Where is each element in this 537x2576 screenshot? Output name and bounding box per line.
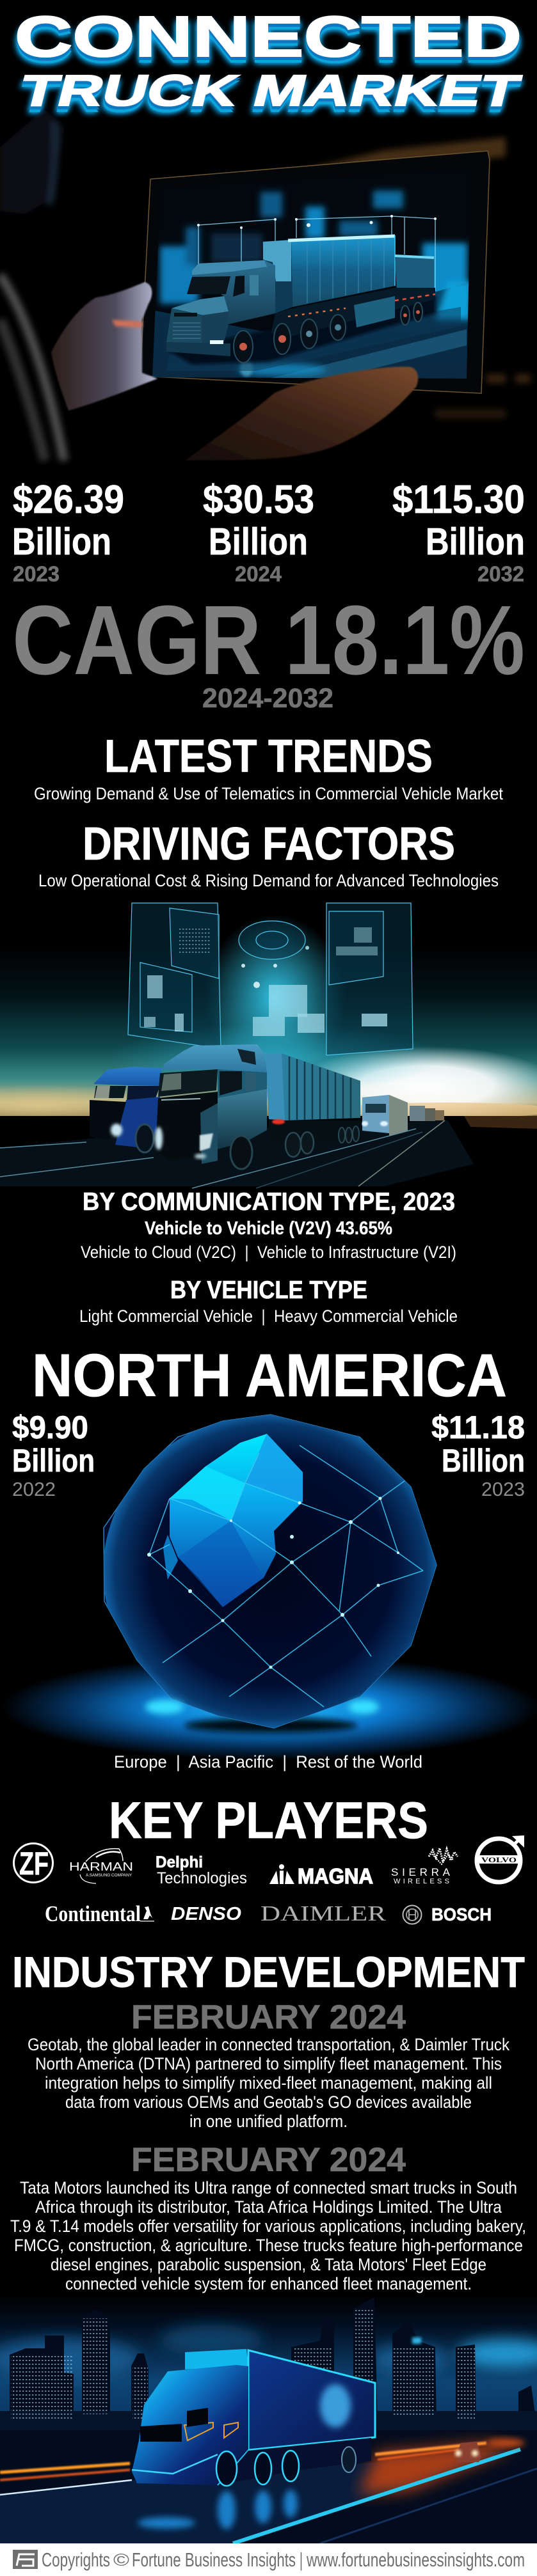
floor shadow bbox=[184, 1718, 357, 1733]
logo: Magna bbox=[269, 1864, 373, 1888]
blurred skyline on screen bbox=[160, 191, 467, 307]
development 2 bbox=[10, 2141, 526, 2293]
logo: Volvo bbox=[477, 1835, 524, 1882]
clouds bbox=[0, 2325, 537, 2382]
stat: 2032: 2032 bbox=[477, 562, 524, 586]
road bbox=[0, 2430, 537, 2511]
logo: Delphi Technologies: Delphi bbox=[156, 1853, 203, 1871]
hologram cargo glyphs bbox=[144, 927, 387, 1036]
region: North America heading: NORTH AMERICA bbox=[32, 1342, 507, 1410]
stat: North America 2023: Billion bbox=[442, 1443, 525, 1479]
sphere rim and network bbox=[103, 1413, 438, 1729]
road lines bbox=[0, 2480, 132, 2495]
stat: 2032: $115.30 bbox=[392, 478, 525, 522]
right glow spot bbox=[348, 1700, 379, 1714]
city image: neon truck on highway bbox=[0, 2295, 537, 2543]
other regions: Europe | Asia Pacific | Rest of the World bbox=[114, 1752, 422, 1771]
development 2: diesel engines, parabolic suspension, & Tata Motors' Fleet Edge bbox=[51, 2255, 486, 2274]
globe bbox=[2, 1413, 537, 1760]
development 2: connected vehicle system for enhanced fleet management. bbox=[65, 2274, 472, 2293]
copyright text: | bbox=[300, 2549, 303, 2571]
logo: Denso: DENSO bbox=[171, 1904, 241, 1924]
tablet bbox=[140, 151, 490, 393]
logo: Harman: HARMAN bbox=[69, 1860, 133, 1873]
stat: 2024 bbox=[203, 478, 314, 586]
development 1: in one unified platform. bbox=[189, 2112, 348, 2131]
by communication type: Vehicle to Vehicle (V2V) 43.65% bbox=[145, 1218, 392, 1239]
stat: 2024: 2024 bbox=[235, 562, 282, 586]
copyright text bbox=[42, 2549, 525, 2571]
title line 1: CONNECTED bbox=[15, 5, 522, 69]
logo: Sierra Wireless: SIERRA bbox=[391, 1866, 451, 1878]
truck cab bbox=[192, 260, 275, 324]
stat: North America 2022: 2022 bbox=[12, 1478, 56, 1500]
stat: 2023: Billion bbox=[12, 521, 111, 563]
development 2: Africa through its distributor, Tata Africa Holdings Limited. The Ultra bbox=[35, 2197, 502, 2217]
car bbox=[455, 2439, 525, 2462]
stat: North America 2023: 2023 bbox=[481, 1478, 525, 1500]
latest trends: LATEST TRENDS bbox=[104, 731, 433, 782]
logo: ZF bbox=[14, 1843, 52, 1883]
road image: trucks under holographic data bbox=[0, 903, 537, 1188]
hero image: hands holding tablet with truck bbox=[0, 109, 531, 460]
title bbox=[15, 5, 525, 115]
logo: Daimler: DAIMLER bbox=[260, 1902, 386, 1926]
key players heading: KEY PLAYERS bbox=[109, 1792, 428, 1850]
title line 2: TRUCK MARKET bbox=[15, 66, 525, 115]
reflections bbox=[138, 2490, 298, 2529]
stat: 2023: $26.39 bbox=[13, 478, 124, 522]
road surface bbox=[152, 281, 471, 379]
development 1: FEBRUARY 2024 bbox=[131, 1999, 406, 2036]
main truck container bbox=[266, 1053, 362, 1157]
by communication type: Vehicle to Cloud (V2C) | Vehicle to Infrastructure (V2I) bbox=[81, 1243, 456, 1262]
left blue truck bbox=[90, 1067, 162, 1152]
neon truck bbox=[132, 2349, 375, 2486]
by vehicle type bbox=[79, 1276, 458, 1326]
latest trends bbox=[34, 731, 503, 803]
stat: 2023 bbox=[12, 478, 124, 586]
truck chassis bbox=[271, 288, 435, 339]
by communication type: BY COMMUNICATION TYPE, 2023 bbox=[83, 1188, 455, 1216]
truck wheels bbox=[234, 302, 422, 363]
left hand bbox=[51, 282, 157, 411]
footer logo bbox=[13, 2550, 38, 2569]
logo: ZF: ZF bbox=[19, 1846, 49, 1881]
night sky bbox=[0, 2302, 537, 2411]
wireframe box bbox=[198, 216, 435, 291]
logo: Magna: MAGNA bbox=[298, 1864, 373, 1888]
development 1: data from various OEMs and Geotab's GO devices available bbox=[65, 2093, 472, 2112]
stat: North America 2022: Billion bbox=[12, 1443, 95, 1479]
stat: North America 2022 bbox=[12, 1410, 95, 1500]
logo: Harman: A SAMSUNG COMPANY bbox=[86, 1874, 132, 1878]
rear container bbox=[395, 257, 434, 288]
main truck cab bbox=[155, 1044, 267, 1169]
light trails bbox=[0, 2443, 486, 2480]
hologram panels bbox=[128, 903, 413, 1055]
logo: Volvo: VOLVO bbox=[481, 1855, 517, 1864]
logo: Bosch bbox=[403, 1905, 492, 1924]
building windows bbox=[11, 2310, 475, 2421]
logo: Harman bbox=[69, 1849, 133, 1883]
truck shadow bbox=[168, 295, 435, 365]
stat: 2032 bbox=[392, 478, 525, 586]
stat: 2024: $30.53 bbox=[203, 478, 314, 522]
logos bbox=[14, 1835, 524, 1926]
driving factors bbox=[38, 819, 499, 890]
by communication type bbox=[81, 1188, 456, 1262]
copyright text: Copyrights bbox=[42, 2549, 110, 2571]
skyline bbox=[0, 2297, 537, 2430]
glow spots on floor bbox=[145, 1700, 184, 1714]
by vehicle type: BY VEHICLE TYPE bbox=[170, 1276, 367, 1304]
development 1: integration helps to simplify mixed-fleet management, making all bbox=[45, 2073, 492, 2093]
blurred warm background lights bbox=[240, 137, 531, 418]
copyright text: © bbox=[113, 2550, 129, 2570]
truck container bbox=[291, 235, 395, 307]
sphere body bbox=[104, 1415, 437, 1728]
person silhouette and sleeve bbox=[0, 109, 64, 460]
floor glow bbox=[2, 1655, 537, 1760]
stat: North America 2023 bbox=[431, 1410, 525, 1500]
driving factors: DRIVING FACTORS bbox=[83, 819, 455, 870]
copyright text: Fortune Business Insights bbox=[132, 2549, 296, 2571]
logo: Sierra Wireless: WIRELESS bbox=[394, 1878, 449, 1885]
development 1 bbox=[28, 1999, 509, 2131]
CAGR: 2024-2032 bbox=[202, 683, 333, 714]
logo: Sierra Wireless bbox=[391, 1848, 458, 1885]
logo: Delphi Technologies: Technologies bbox=[157, 1869, 247, 1887]
logo: Bosch: BOSCH bbox=[431, 1905, 492, 1924]
by vehicle type: Light Commercial Vehicle | Heavy Commercial Vehicle bbox=[79, 1307, 458, 1326]
logo: Continental: Continental bbox=[45, 1901, 141, 1926]
footer bbox=[0, 2543, 537, 2576]
stat: North America 2023: $11.18 bbox=[431, 1410, 525, 1445]
stat: 2024: Billion bbox=[209, 521, 308, 563]
stat: 2023: 2023 bbox=[13, 562, 60, 586]
distant trucks bbox=[362, 1095, 444, 1136]
logo: Delphi Technologies bbox=[156, 1853, 247, 1887]
ground bbox=[0, 1116, 537, 1188]
stat: North America 2022: $9.90 bbox=[12, 1410, 88, 1445]
development 2: FEBRUARY 2024 bbox=[131, 2141, 406, 2179]
right hand bbox=[185, 366, 418, 460]
dawn sky bbox=[0, 915, 537, 1126]
